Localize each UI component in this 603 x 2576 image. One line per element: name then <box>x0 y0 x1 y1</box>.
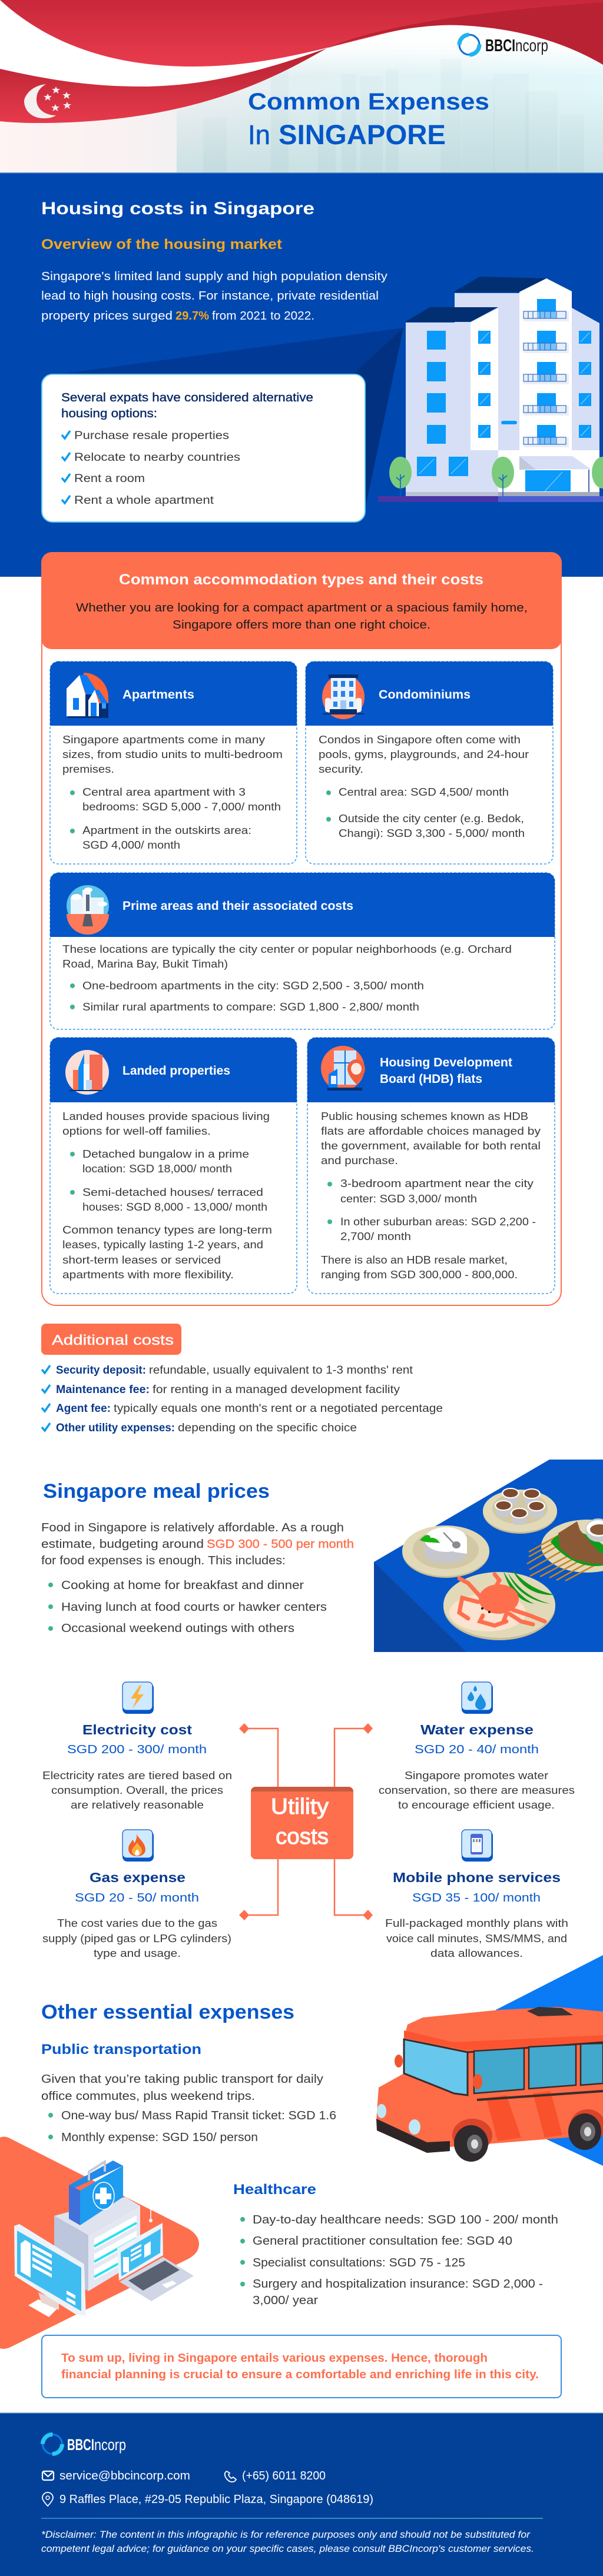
item: water: Singapore promotes water <box>405 1769 548 1781</box>
disclaimer: *Disclaimer: The content in this infographic is for reference purposes only and should not be substituted for <box>41 2530 531 2540</box>
panel: additional costs <box>41 1324 443 1434</box>
heading badge: additional costs <box>41 1324 181 1355</box>
card: HDB flats: There is also an HDB resale market, <box>321 1254 508 1266</box>
card: landed properties: houses: SGD 8,000 - 13,000/ month <box>82 1201 267 1213</box>
list: meal items <box>48 1579 327 1635</box>
crab plate <box>443 1570 556 1640</box>
callout: alternative housing options: Rent a room <box>74 472 145 485</box>
text: public transportation <box>41 2073 336 2144</box>
icon: city road <box>67 885 109 935</box>
card: landed properties: Detached bungalow in a prime <box>82 1148 249 1160</box>
item: electricity: SGD 200 - 300/ month <box>67 1743 207 1756</box>
list: additional cost items: Maintenance fee: <box>56 1383 150 1396</box>
title: SINGAPORE <box>279 119 446 150</box>
section: healthcare: Healthcare <box>233 2182 316 2198</box>
text: housing overview paragraph <box>41 270 387 323</box>
text: housing overview paragraph: 29.7% <box>175 310 209 323</box>
card: condominiums: Condos in Singapore often come with <box>319 733 521 746</box>
card: landed properties: Common tenancy types are long-term <box>62 1224 272 1236</box>
item: electricity: are relatively reasonable <box>71 1799 204 1811</box>
illustration: bus <box>376 1955 603 2166</box>
item: gas: Gas expense <box>90 1870 185 1885</box>
title: In <box>248 119 270 150</box>
illustration: food plates <box>374 1460 603 1652</box>
card: prime areas: Road, Marina Bay, Bukit Timah) <box>62 958 228 970</box>
card: condominiums: Outside the city center (e.g. Bedok, <box>339 812 524 825</box>
section: healthcare: Specialist consultations: SGD 75 - 125 <box>253 2256 465 2269</box>
list: meal items: Cooking at home for breakfast and dinner <box>61 1579 304 1592</box>
logo: BBCIncorp <box>459 35 548 55</box>
item: gas: type and usage. <box>94 1947 181 1959</box>
section: healthcare: 3,000/ year <box>253 2294 318 2307</box>
card: condominiums: security. <box>319 763 363 775</box>
header: common accommodation types: Whether you are looking for a compact apartment or a spacious family home, <box>76 601 528 614</box>
logo: BBCIncorp: BBCI <box>485 36 515 55</box>
list: additional cost items: refundable, usually equivalent to 1-3 months' rent <box>149 1364 413 1377</box>
text: public transportation: office commutes, plus weekend trips. <box>41 2090 255 2103</box>
panel: housing costs (blue section) <box>0 172 603 577</box>
title: Common Expenses <box>248 89 489 115</box>
item: gas: SGD 20 - 50/ month <box>75 1892 199 1904</box>
header: common accommodation types: Common accommodation types and their costs <box>119 571 483 588</box>
item: mobile phone: Full-packaged monthly plans with <box>385 1917 568 1929</box>
item: mobile phone <box>385 1830 568 1959</box>
text: meal budget: estimate, budgeting around <box>41 1538 204 1551</box>
text: housing overview paragraph: Singapore's limited land supply and high population density <box>41 270 387 283</box>
card: prime areas: One-bedroom apartments in the city: SGD 2,500 - 3,500/ month <box>82 979 424 992</box>
satay plate <box>527 1518 603 1581</box>
icon: flame <box>122 1830 154 1862</box>
card: landed properties: short-term leases or serviced <box>62 1254 221 1266</box>
list: additional cost items: depending on the specific choice <box>178 1421 357 1434</box>
text: housing overview paragraph: lead to high housing costs. For instance, private residential <box>41 290 379 303</box>
card: HDB flats <box>307 1038 555 1294</box>
illustration: apartment building <box>58 277 603 503</box>
illustration: healthcare devices <box>0 2137 199 2349</box>
callout: conclusion: financial planning is crucial to ensure a comfortable and enriching life in this city. <box>61 2368 539 2381</box>
text: meal budget <box>41 1521 354 1567</box>
text: housing overview paragraph: property prices surged <box>41 310 173 323</box>
bowl plate <box>402 1525 489 1578</box>
contact: phone: (+65) 6011 8200 <box>242 2469 326 2482</box>
item: water: SGD 20 - 40/ month <box>415 1743 539 1756</box>
item: water: Water expense <box>420 1722 534 1737</box>
card: HDB flats: Housing Development <box>380 1056 512 1069</box>
list: additional cost items: Other utility expenses: <box>56 1421 175 1434</box>
center box: utility costs: Utility <box>271 1794 329 1819</box>
card: condominiums: Central area: SGD 4,500/ month <box>339 786 509 798</box>
card: apartments: sizes, from studio units to multi-bedroom <box>62 748 283 760</box>
callout: alternative housing options <box>42 374 365 522</box>
card: landed properties: Landed properties <box>122 1064 230 1078</box>
list: meal items: Occasional weekend outings with others <box>61 1622 294 1635</box>
title <box>248 89 489 150</box>
callout: alternative housing options: Rent a whole apartment <box>74 494 214 507</box>
card: apartments: Singapore apartments come in many <box>62 733 266 746</box>
section: healthcare: Surgery and hospitalization insurance: SGD 2,000 - <box>253 2278 543 2291</box>
disclaimer <box>41 2530 534 2554</box>
icon: phone <box>462 1830 493 1862</box>
logo: BBCIncorp: ncorp <box>515 36 548 55</box>
center box: utility costs <box>251 1787 353 1859</box>
logo: BBCIncorp white: ncorp <box>94 2436 126 2454</box>
card: HDB flats: the government, available for both rental <box>321 1139 541 1152</box>
text: public transportation: Monthly expense: SGD 150/ person <box>61 2131 258 2144</box>
icon: houses <box>67 673 108 718</box>
card: HDB flats: Public housing schemes known as HDB <box>321 1110 528 1122</box>
connector lines <box>244 1729 368 1915</box>
icon: building and map pin <box>321 1046 365 1091</box>
card: condominiums <box>306 662 553 864</box>
card: landed properties <box>50 1038 297 1294</box>
panel: meal prices <box>41 1460 603 1652</box>
header: common accommodation types <box>41 552 562 649</box>
section: healthcare <box>233 2182 558 2307</box>
card: landed properties: options for well-off families. <box>62 1125 211 1137</box>
card: prime areas: These locations are typically the city center or popular neighborhoods (e.g. Orchard <box>62 943 512 955</box>
card: prime areas <box>50 873 555 1029</box>
text: public transportation: One-way bus/ Mass Rapid Transit ticket: SGD 1.6 <box>61 2109 336 2122</box>
icon: condo tower <box>322 674 365 719</box>
card: apartments: premises. <box>62 763 114 775</box>
icon: lightning <box>122 1682 154 1714</box>
item: electricity <box>42 1682 232 1811</box>
logo: BBCIncorp white: BBCI <box>67 2436 94 2454</box>
card: landed properties: Semi-detached houses/ terraced <box>82 1186 263 1198</box>
item: mobile phone: Mobile phone services <box>393 1870 561 1885</box>
item: electricity: Electricity rates are tiered based on <box>42 1769 232 1781</box>
card: condominiums: pools, gyms, playgrounds, and 24-hour <box>319 748 529 760</box>
callout: alternative housing options: Purchase resale properties <box>74 429 229 442</box>
callout: conclusion: To sum up, living in Singapore entails various expenses. Hence, thorough <box>61 2352 488 2365</box>
item: gas <box>42 1830 231 1959</box>
card: HDB flats: ranging from SGD 300,000 - 800,000. <box>321 1268 518 1281</box>
list: additional cost items: typically equals one month's rent or a negotiated percentage <box>114 1402 443 1415</box>
subheading: overview: Overview of the housing market <box>41 237 282 252</box>
card: prime areas: Prime areas and their associated costs <box>122 899 353 913</box>
card: HDB flats: flats are affordable choices managed by <box>321 1125 541 1137</box>
callout: alternative housing options: Relocate to nearby countries <box>74 451 240 464</box>
item: water: to encourage efficient usage. <box>398 1799 555 1811</box>
section: healthcare: General practitioner consultation fee: SGD 40 <box>253 2235 512 2248</box>
section: healthcare: Day-to-day healthcare needs: SGD 100 - 200/ month <box>253 2213 558 2226</box>
logo: BBCIncorp white <box>42 2434 126 2454</box>
item: water: conservation, so there are measures <box>379 1784 575 1796</box>
list: additional cost items: Agent fee: <box>56 1402 111 1415</box>
item: mobile phone: SGD 35 - 100/ month <box>412 1892 541 1904</box>
header: common accommodation types: Singapore offers more than one right choice. <box>173 619 430 631</box>
panel: other essential expenses <box>0 1955 603 2349</box>
card: prime areas: Similar rural apartments to compare: SGD 1,800 - 2,800/ month <box>82 1001 419 1013</box>
red flag wave: lower band <box>0 48 327 123</box>
card: apartments: Central area apartment with 3 <box>82 786 246 798</box>
card: condominiums: Changi): SGD 3,300 - 5,000/ month <box>339 827 525 839</box>
card: HDB flats: 3-bedroom apartment near the city <box>340 1177 534 1189</box>
heading: housing costs: Housing costs in Singapore <box>41 199 314 218</box>
text: public transportation: Given that you’re taking public transport for daily <box>41 2073 323 2086</box>
panel: accommodation types <box>41 552 562 1305</box>
item: electricity: Electricity cost <box>82 1722 192 1737</box>
card: HDB flats: center: SGD 3,000/ month <box>340 1192 477 1205</box>
card: HDB flats: and purchase. <box>321 1154 398 1166</box>
panel: utility costs <box>42 1682 575 1959</box>
list: meal items: Having lunch at food courts or hawker centers <box>61 1601 327 1614</box>
text: housing overview paragraph: from 2021 to 2022. <box>212 310 314 323</box>
subheading: public transportation: Public transportation <box>41 2042 201 2058</box>
flag crescent and stars <box>24 84 71 118</box>
list: additional cost items <box>42 1364 443 1434</box>
item: mobile phone: data allowances. <box>430 1947 523 1959</box>
card: apartments: Apartment in the outskirts area: <box>82 824 251 836</box>
card: landed properties: leases, typically lasting 1-2 years, and <box>62 1238 263 1251</box>
center box: utility costs: costs <box>276 1824 329 1849</box>
card: condominiums: Condominiums <box>379 688 471 702</box>
item: gas: supply (piped gas or LPG cylinders) <box>42 1932 231 1945</box>
icon: water drops <box>462 1682 493 1714</box>
card: apartments <box>50 662 297 864</box>
callout: alternative housing options: housing options: <box>61 407 157 420</box>
list: additional cost items: for renting in a managed development facility <box>153 1383 400 1396</box>
card: HDB flats: 2,700/ month <box>340 1230 411 1242</box>
card: apartments: SGD 4,000/ month <box>82 839 180 851</box>
card: apartments: bedrooms: SGD 5,000 - 7,000/ month <box>82 800 281 813</box>
text: meal budget: SGD 300 - 500 per month <box>207 1538 354 1551</box>
heading: other essential expenses: Other essential expenses <box>41 2001 294 2023</box>
item: water <box>379 1682 575 1811</box>
card: landed properties: Landed houses provide spacious living <box>62 1110 270 1122</box>
city skyline <box>203 59 584 173</box>
heading: meal prices: Singapore meal prices <box>43 1480 270 1503</box>
icon: towers <box>65 1050 109 1095</box>
card: HDB flats: Board (HDB) flats <box>380 1072 482 1086</box>
red flag wave: upper band <box>0 0 603 67</box>
hero banner <box>0 0 603 173</box>
callout: alternative housing options: Several expats have considered alternative <box>61 391 313 404</box>
card: landed properties: location: SGD 18,000/ month <box>82 1162 232 1175</box>
item: gas: The cost varies due to the gas <box>57 1917 217 1929</box>
list: additional cost items: Security deposit: <box>56 1364 146 1377</box>
card: apartments: Apartments <box>122 688 194 702</box>
heading badge: additional costs: Additional costs <box>52 1332 174 1348</box>
text: meal budget: for food expenses is enough. This includes: <box>41 1554 286 1567</box>
cups plate <box>483 1488 557 1534</box>
card: landed properties: apartments with more flexibility. <box>62 1268 234 1281</box>
footer <box>0 2412 603 2576</box>
item: electricity: consumption. Overall, the prices <box>51 1784 223 1796</box>
text: meal budget: Food in Singapore is relatively affordable. As a rough <box>41 1521 344 1534</box>
card: HDB flats: In other suburban areas: SGD 2,200 - <box>340 1215 536 1228</box>
callout: conclusion <box>42 2335 561 2398</box>
contact: email: service@bbcincorp.com <box>59 2469 190 2482</box>
item: mobile phone: voice call minutes, SMS/MMS, and <box>386 1932 567 1945</box>
contact: address: 9 Raffles Place, #29-05 Republic Plaza, Singapore (048619) <box>59 2493 373 2506</box>
disclaimer: competent legal advice; for guidance on your specific cases, please consult BBCIncorp's customer services. <box>41 2544 534 2554</box>
